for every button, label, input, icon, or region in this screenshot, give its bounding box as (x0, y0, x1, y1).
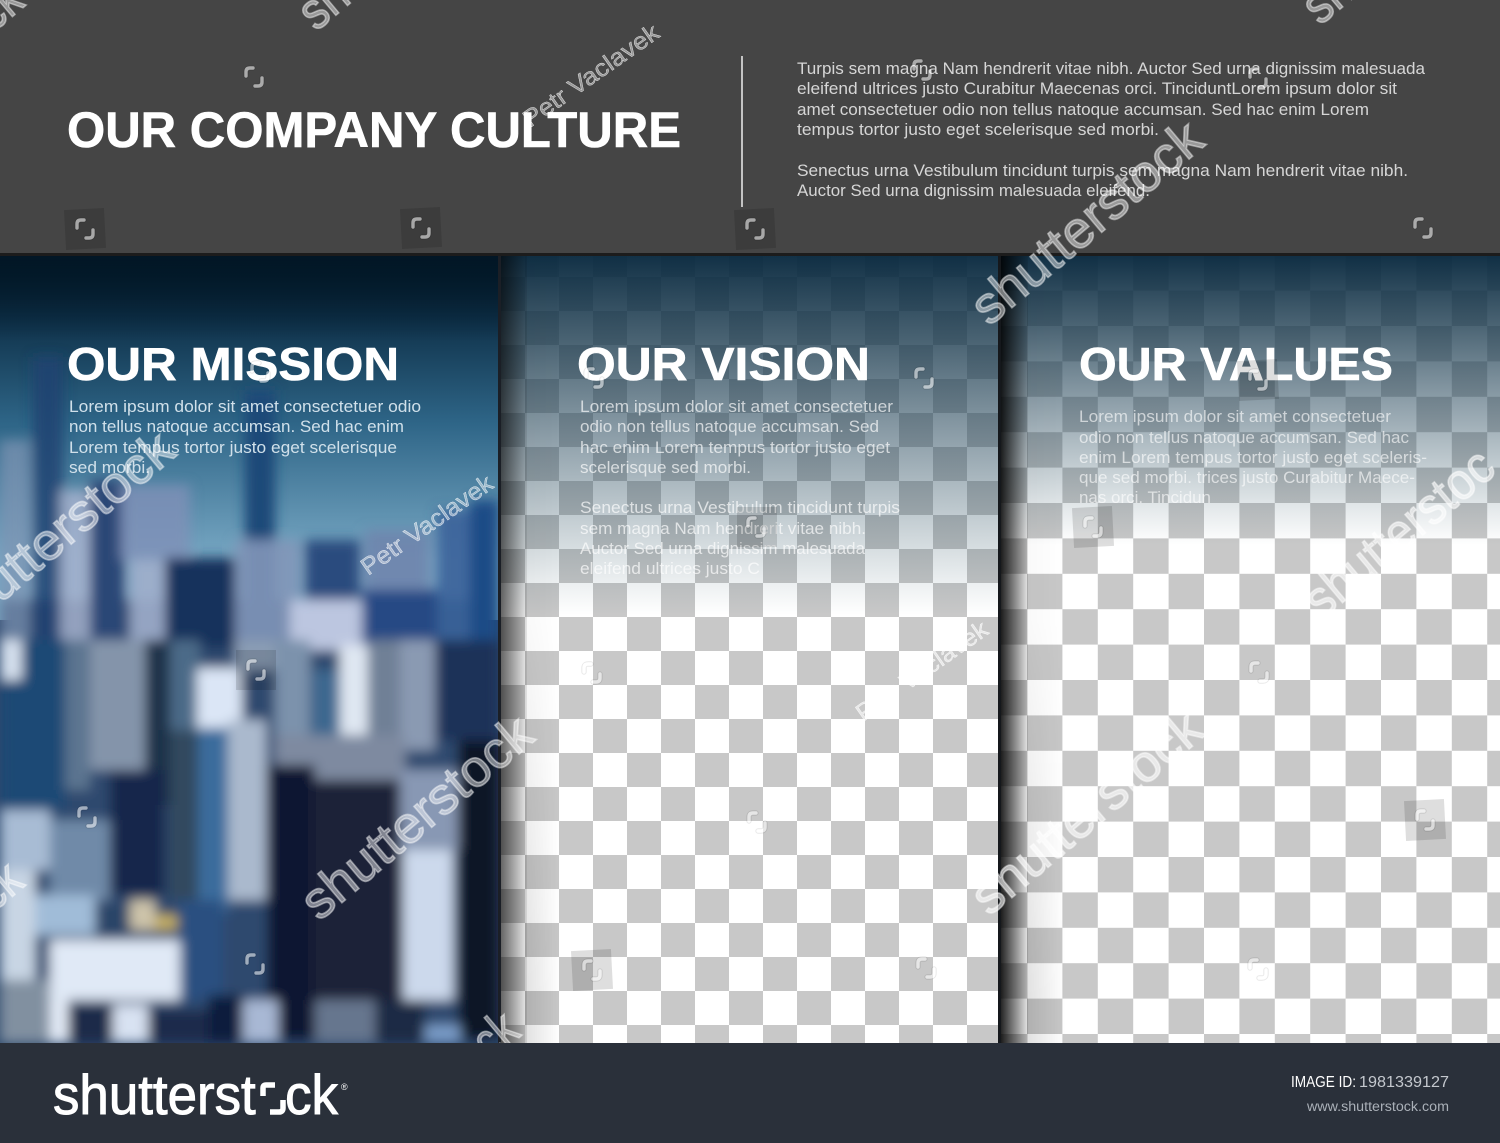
watermark overlay: shutterstock (289, 704, 545, 931)
mission text: sed morbi. (69, 459, 150, 477)
watermark overlay: Petr Vaclavek (851, 615, 994, 727)
panel: our values (1001, 255, 1500, 1043)
vision text: sem magna Nam hendrerit vitae nibh. (580, 520, 866, 538)
vision text: odio non tellus natoque accumsan. Sed (580, 418, 879, 436)
values text: nas orci. Tincidun (1079, 489, 1211, 507)
heading: our values: OUR VALUES (1079, 338, 1393, 390)
header divider (741, 56, 743, 207)
checker placeholder (1001, 255, 1500, 1043)
image id: IMAGE ID: (1291, 1074, 1356, 1091)
mission text: Lorem ipsum dolor sit amet consectetuer odio (69, 398, 421, 416)
watermark overlay: Petr Vaclavek (356, 469, 499, 581)
values text: enim Lorem tempus tortor justo eget sceleris- (1079, 449, 1427, 467)
watermark overlay: Petr Vaclavek (518, 18, 665, 133)
checker placeholder (501, 255, 998, 1043)
vision text: Lorem ipsum dolor sit amet consectetuer (580, 398, 894, 416)
vision text: hac enim Lorem tempus tortor justo eget (580, 439, 890, 457)
values text (1079, 408, 1427, 507)
blurred city photo (0, 255, 499, 1043)
vision text: Auctor Sed urna dignissim malesuada (580, 540, 866, 558)
image id: 1981339127 (1359, 1074, 1449, 1091)
header text block (797, 60, 1426, 200)
header text block: eleifend ultrices justo Curabitur Maecenas orci. TinciduntLorem ipsum dolor sit (797, 80, 1397, 98)
vision text: eleifend ultrices justo C (580, 560, 760, 578)
heading: our vision: OUR VISION (577, 338, 870, 390)
watermark overlay: ck (460, 999, 531, 1071)
values text: que sed morbi. trices justo Curabitur Maece- (1079, 469, 1415, 487)
vision text: scelerisque sed morbi. (580, 459, 751, 477)
shutterstock logo: ® (341, 1082, 348, 1092)
header panel (0, 0, 1500, 254)
vision text: Senectus urna Vestibulum tincidunt turpis (580, 499, 900, 517)
header text block: Senectus urna Vestibulum tincidunt turpis sem magna Nam hendrerit vitae nibh. (797, 162, 1408, 180)
panel: our vision (501, 255, 998, 1043)
header text block: tempus tortor justo eget scelerisque sed morbi. (797, 121, 1159, 139)
shutterstock logo: shutterstock (53, 1063, 339, 1126)
mission text (69, 398, 421, 477)
watermark overlay: shutterstock (959, 109, 1215, 336)
header text block: Turpis sem magna Nam hendrerit vitae nibh. Auctor Sed urna dignissim malesuada (797, 60, 1426, 78)
website: www.shutterstock.com (1306, 1099, 1449, 1114)
footer bar (0, 1043, 1500, 1143)
title: OUR COMPANY CULTURE (67, 102, 681, 158)
heading: our mission: OUR MISSION (67, 338, 399, 390)
panel: our mission (0, 255, 499, 1043)
values text: odio non tellus natoque accumsan. Sed hac (1079, 429, 1409, 447)
values text: Lorem ipsum dolor sit amet consectetuer (1079, 408, 1392, 426)
watermark overlay: shutterstock (959, 699, 1215, 926)
vision text (580, 398, 900, 578)
mission text: Lorem tempus tortor justo eget scelerisque (69, 439, 397, 457)
header text block: amet consectetuer odio non tellus natoque accumsan. Sed hac enim Lorem (797, 101, 1369, 119)
image id (1291, 1074, 1449, 1091)
header text block: Auctor Sed urna dignissim malesuada eleifend. (797, 182, 1150, 200)
mission text: non tellus natoque accumsan. Sed hac enim (69, 418, 404, 436)
